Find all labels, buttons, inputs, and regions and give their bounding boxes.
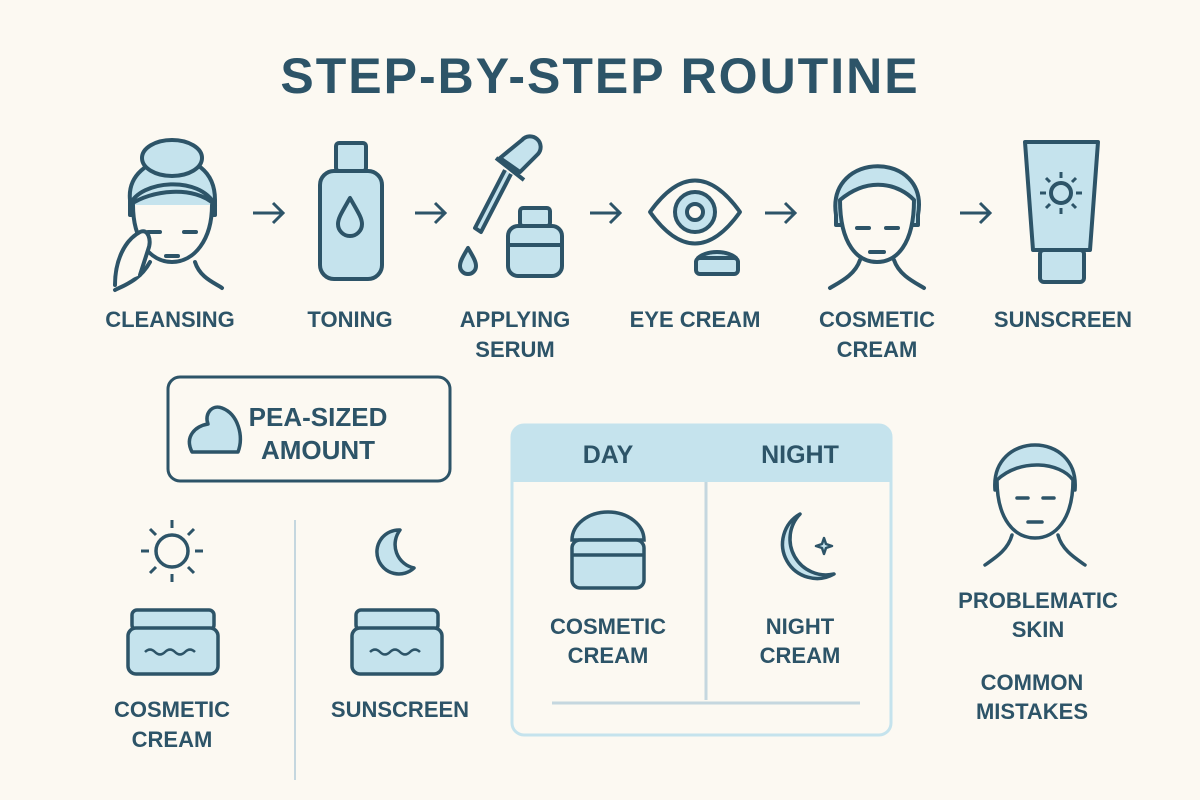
panel: problematic skin: COMMON bbox=[981, 670, 1083, 695]
callout: pea-sized amount: AMOUNT bbox=[261, 435, 375, 465]
label: cosmetic cream: CREAM bbox=[132, 727, 212, 752]
arrow bbox=[253, 203, 283, 223]
step: cleansing bbox=[115, 140, 222, 290]
panel: day/night table: DAY bbox=[583, 441, 634, 469]
title: STEP-BY-STEP ROUTINE bbox=[280, 48, 920, 104]
step: sunscreen bbox=[1025, 142, 1098, 282]
step labels: SERUM bbox=[475, 337, 555, 362]
callout: pea-sized amount bbox=[168, 377, 450, 481]
step labels: SUNSCREEN bbox=[994, 307, 1132, 332]
panel: problematic skin: MISTAKES bbox=[976, 699, 1088, 724]
step labels: EYE CREAM bbox=[630, 307, 760, 332]
panel: problematic skin: PROBLEMATIC bbox=[958, 588, 1118, 613]
panel: problematic skin bbox=[958, 445, 1118, 724]
step labels: APPLYING bbox=[460, 307, 570, 332]
icon: cream jar bbox=[572, 512, 644, 588]
step: cosmetic cream bbox=[830, 166, 924, 288]
arrow bbox=[960, 203, 990, 223]
callout: pea-sized amount: PEA-SIZED bbox=[249, 402, 387, 432]
panel: night sunscreen bbox=[352, 530, 442, 674]
arrow bbox=[415, 203, 445, 223]
panel: problematic skin: SKIN bbox=[1012, 617, 1064, 642]
icon: cream blob bbox=[189, 407, 240, 452]
panel: day/night table: NIGHT bbox=[761, 441, 839, 469]
arrow bbox=[765, 203, 795, 223]
label: cosmetic cream: COSMETIC bbox=[114, 697, 230, 722]
panel: day/night table: CREAM bbox=[760, 643, 840, 668]
step: toning bbox=[320, 143, 382, 279]
icon: moon with star bbox=[783, 514, 834, 578]
step labels: CLEANSING bbox=[105, 307, 235, 332]
step: eye cream bbox=[650, 180, 740, 274]
step labels: CREAM bbox=[837, 337, 917, 362]
step labels bbox=[105, 307, 1132, 362]
panel: day/night table bbox=[512, 425, 891, 735]
step labels: TONING bbox=[307, 307, 393, 332]
panel: day/night table: NIGHT bbox=[766, 614, 835, 639]
panel: day/night table: COSMETIC bbox=[550, 614, 666, 639]
label: cosmetic cream bbox=[114, 697, 230, 752]
label: sunscreen: SUNSCREEN bbox=[331, 697, 469, 722]
arrow bbox=[590, 203, 620, 223]
panel: day cream bbox=[128, 520, 218, 674]
step labels: COSMETIC bbox=[819, 307, 935, 332]
panel: day/night table: CREAM bbox=[568, 643, 648, 668]
step: applying serum bbox=[460, 136, 562, 276]
